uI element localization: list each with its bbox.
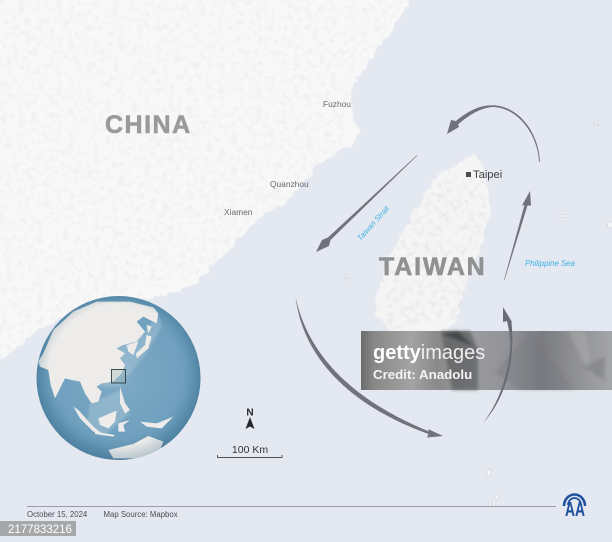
label: Taipei with marker: Taipei	[473, 169, 502, 181]
label: Xiamen: Xiamen	[224, 207, 253, 217]
globe: shallow seas	[87, 313, 162, 437]
arrow: Taiwan Strait southwest arrow	[316, 155, 417, 252]
map: Taiwan terrain texture	[378, 172, 486, 325]
map: small islands	[344, 123, 612, 507]
arrow: top curved arrow around north of Taiwan	[447, 105, 540, 162]
scale bar	[218, 444, 282, 458]
label: Taiwan Strait: Taiwan Strait	[355, 203, 392, 243]
label: CHINA: CHINA	[105, 111, 192, 139]
logo: Anadolu Agency	[564, 494, 585, 521]
footer source: Map Source: Mapbox	[104, 510, 178, 519]
banner dark facets	[441, 331, 605, 390]
watermark wordmark: gettyimages	[373, 342, 485, 364]
logo: Anadolu Agency: AA	[565, 499, 585, 521]
image id strip: 2177833216	[8, 524, 72, 536]
locator globe	[36, 296, 200, 460]
label: Philippine Sea: Philippine Sea	[525, 259, 576, 268]
label: TAIWAN: TAIWAN	[379, 253, 487, 281]
map: China landmass	[0, 0, 413, 368]
north arrow	[246, 408, 254, 429]
label: Quanzhou: Quanzhou	[270, 179, 309, 189]
footer rule	[27, 506, 556, 508]
globe: locator box	[112, 370, 126, 383]
watermark banner	[361, 331, 612, 390]
map: China terrain texture	[0, 2, 378, 342]
arrow: lower-left curved arrow	[296, 297, 443, 438]
image id strip	[0, 521, 76, 536]
footer date: October 15, 2024	[27, 510, 88, 519]
label: Fuzhou: Fuzhou	[323, 99, 351, 109]
scale bar: 100 Km	[232, 444, 268, 456]
watermark credit: Credit: Anadolu	[373, 367, 472, 382]
globe: land masses	[38, 302, 173, 458]
north arrow: N	[246, 408, 254, 418]
map: Taiwan island	[375, 155, 490, 350]
arrow: east coast arrow	[504, 191, 531, 280]
arrow: southeast curved arrow crossing banner	[483, 307, 512, 423]
